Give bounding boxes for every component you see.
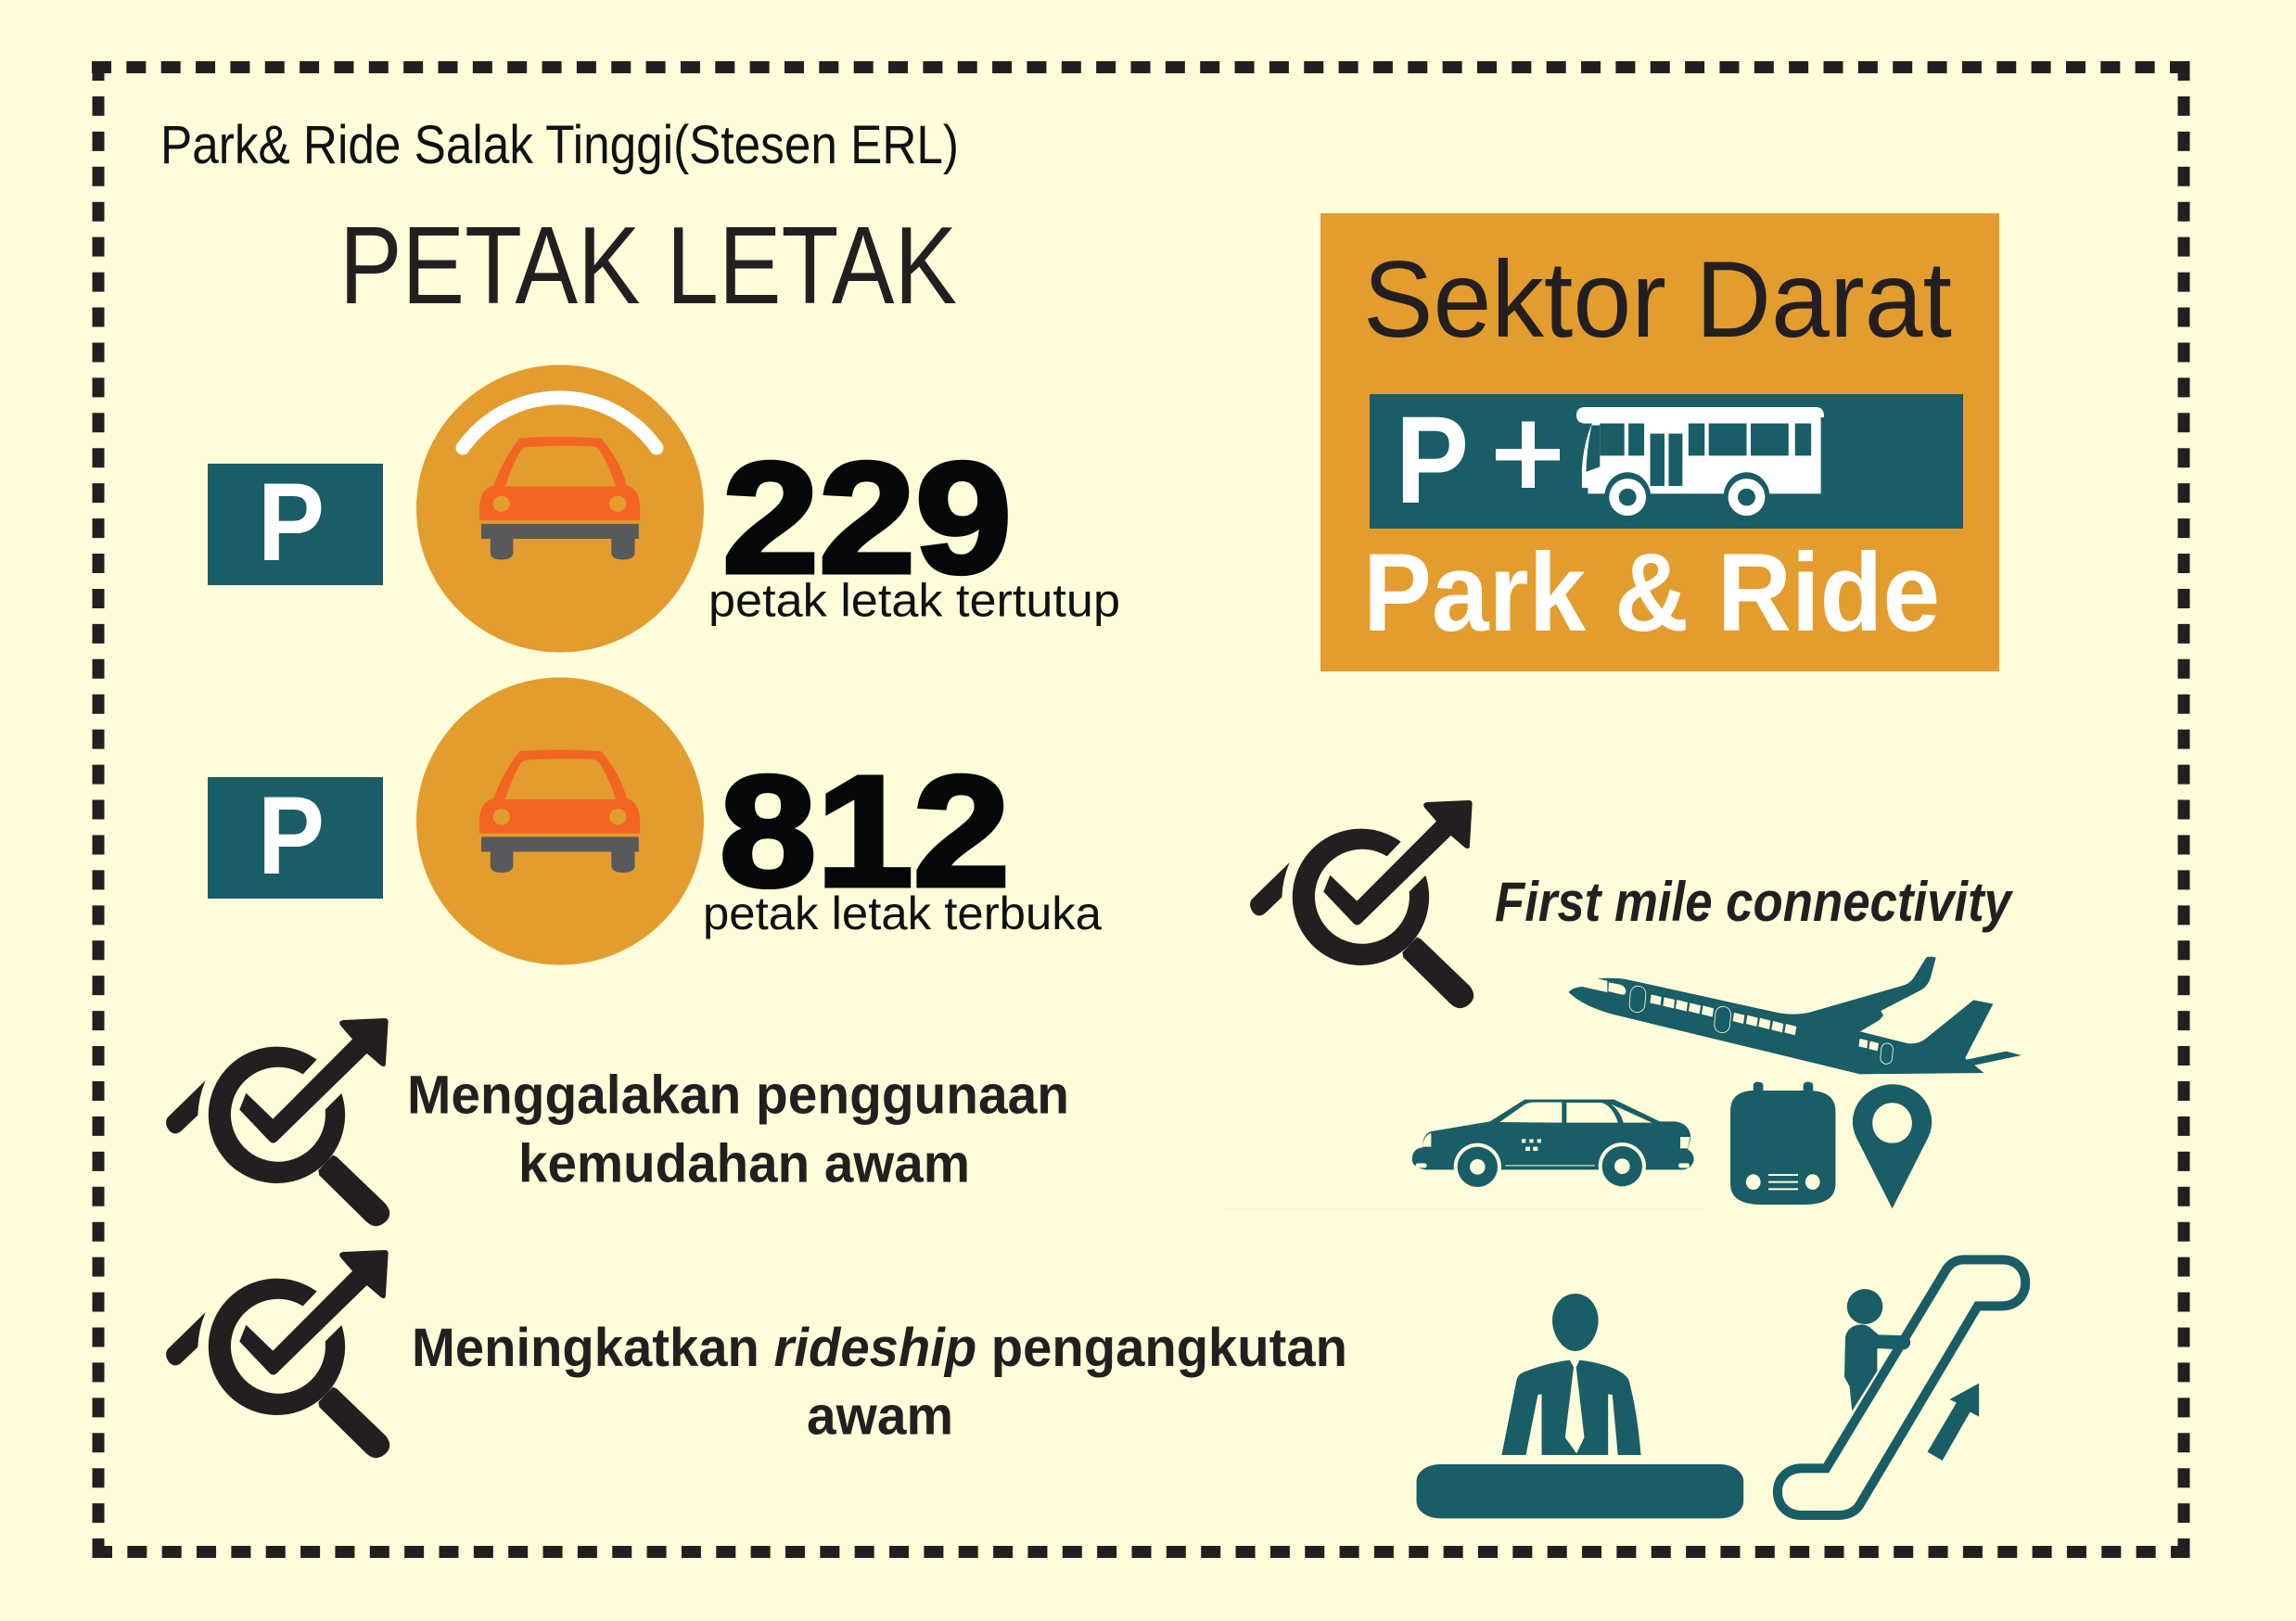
parking sign: P xyxy=(258,460,325,584)
icon: magnifier check arrow 1 xyxy=(166,1018,389,1226)
heading: Sektor Darat: Sektor Darat xyxy=(1363,238,1952,360)
text block: promote public transport: kemudahan awam xyxy=(518,1133,970,1194)
panel: Sektor Darat xyxy=(1320,213,1999,671)
icon: plus xyxy=(1496,421,1560,488)
banner: P + bus: P xyxy=(1396,391,1469,530)
icon: open car in circle xyxy=(416,677,704,964)
number: 229: 229 xyxy=(722,430,1012,606)
parking sign: P xyxy=(258,773,325,898)
icon: taxi xyxy=(1412,1100,1694,1191)
icon: escalator xyxy=(1778,1259,2025,1515)
label: Park & Ride: Park & Ride xyxy=(1363,530,1940,655)
icon: magnifier check arrow 2 xyxy=(166,1250,389,1458)
label: covered bays: petak letak tertutup xyxy=(708,575,1120,627)
banner: P + bus xyxy=(1370,391,1963,530)
text block: increase ridership xyxy=(412,1318,1347,1447)
subtitle: location: Park& Ride Salak Tinggi(Stesen ERL) xyxy=(160,115,959,175)
text: First mile connectivity: First mile connectivity xyxy=(1495,871,2013,933)
parking sign xyxy=(208,773,383,899)
icon: location pin xyxy=(1853,1084,1932,1208)
icon: person at counter xyxy=(1417,1294,1743,1518)
parking sign xyxy=(208,460,383,585)
icon: bus xyxy=(1576,407,1824,521)
panel: open parking xyxy=(208,677,1102,964)
icon: train front xyxy=(1730,1082,1835,1205)
icon: covered car in circle xyxy=(416,365,704,653)
text block: promote public transport: Menggalakan penggunaan xyxy=(407,1065,1069,1126)
number: 812: 812 xyxy=(720,744,1010,920)
text block: increase ridership: Meningkatkan rideship pengangkutan xyxy=(412,1318,1347,1378)
panel: covered parking xyxy=(208,365,1120,653)
icon: airplane xyxy=(1569,957,2022,1074)
text block: promote public transport xyxy=(407,1065,1069,1194)
icon: magnifier check arrow 3 xyxy=(1250,800,1473,1008)
text block: increase ridership: awam xyxy=(807,1385,953,1447)
label: open bays: petak letak terbuka xyxy=(703,887,1102,939)
heading: PETAK LETAK: PETAK LETAK xyxy=(339,204,957,327)
